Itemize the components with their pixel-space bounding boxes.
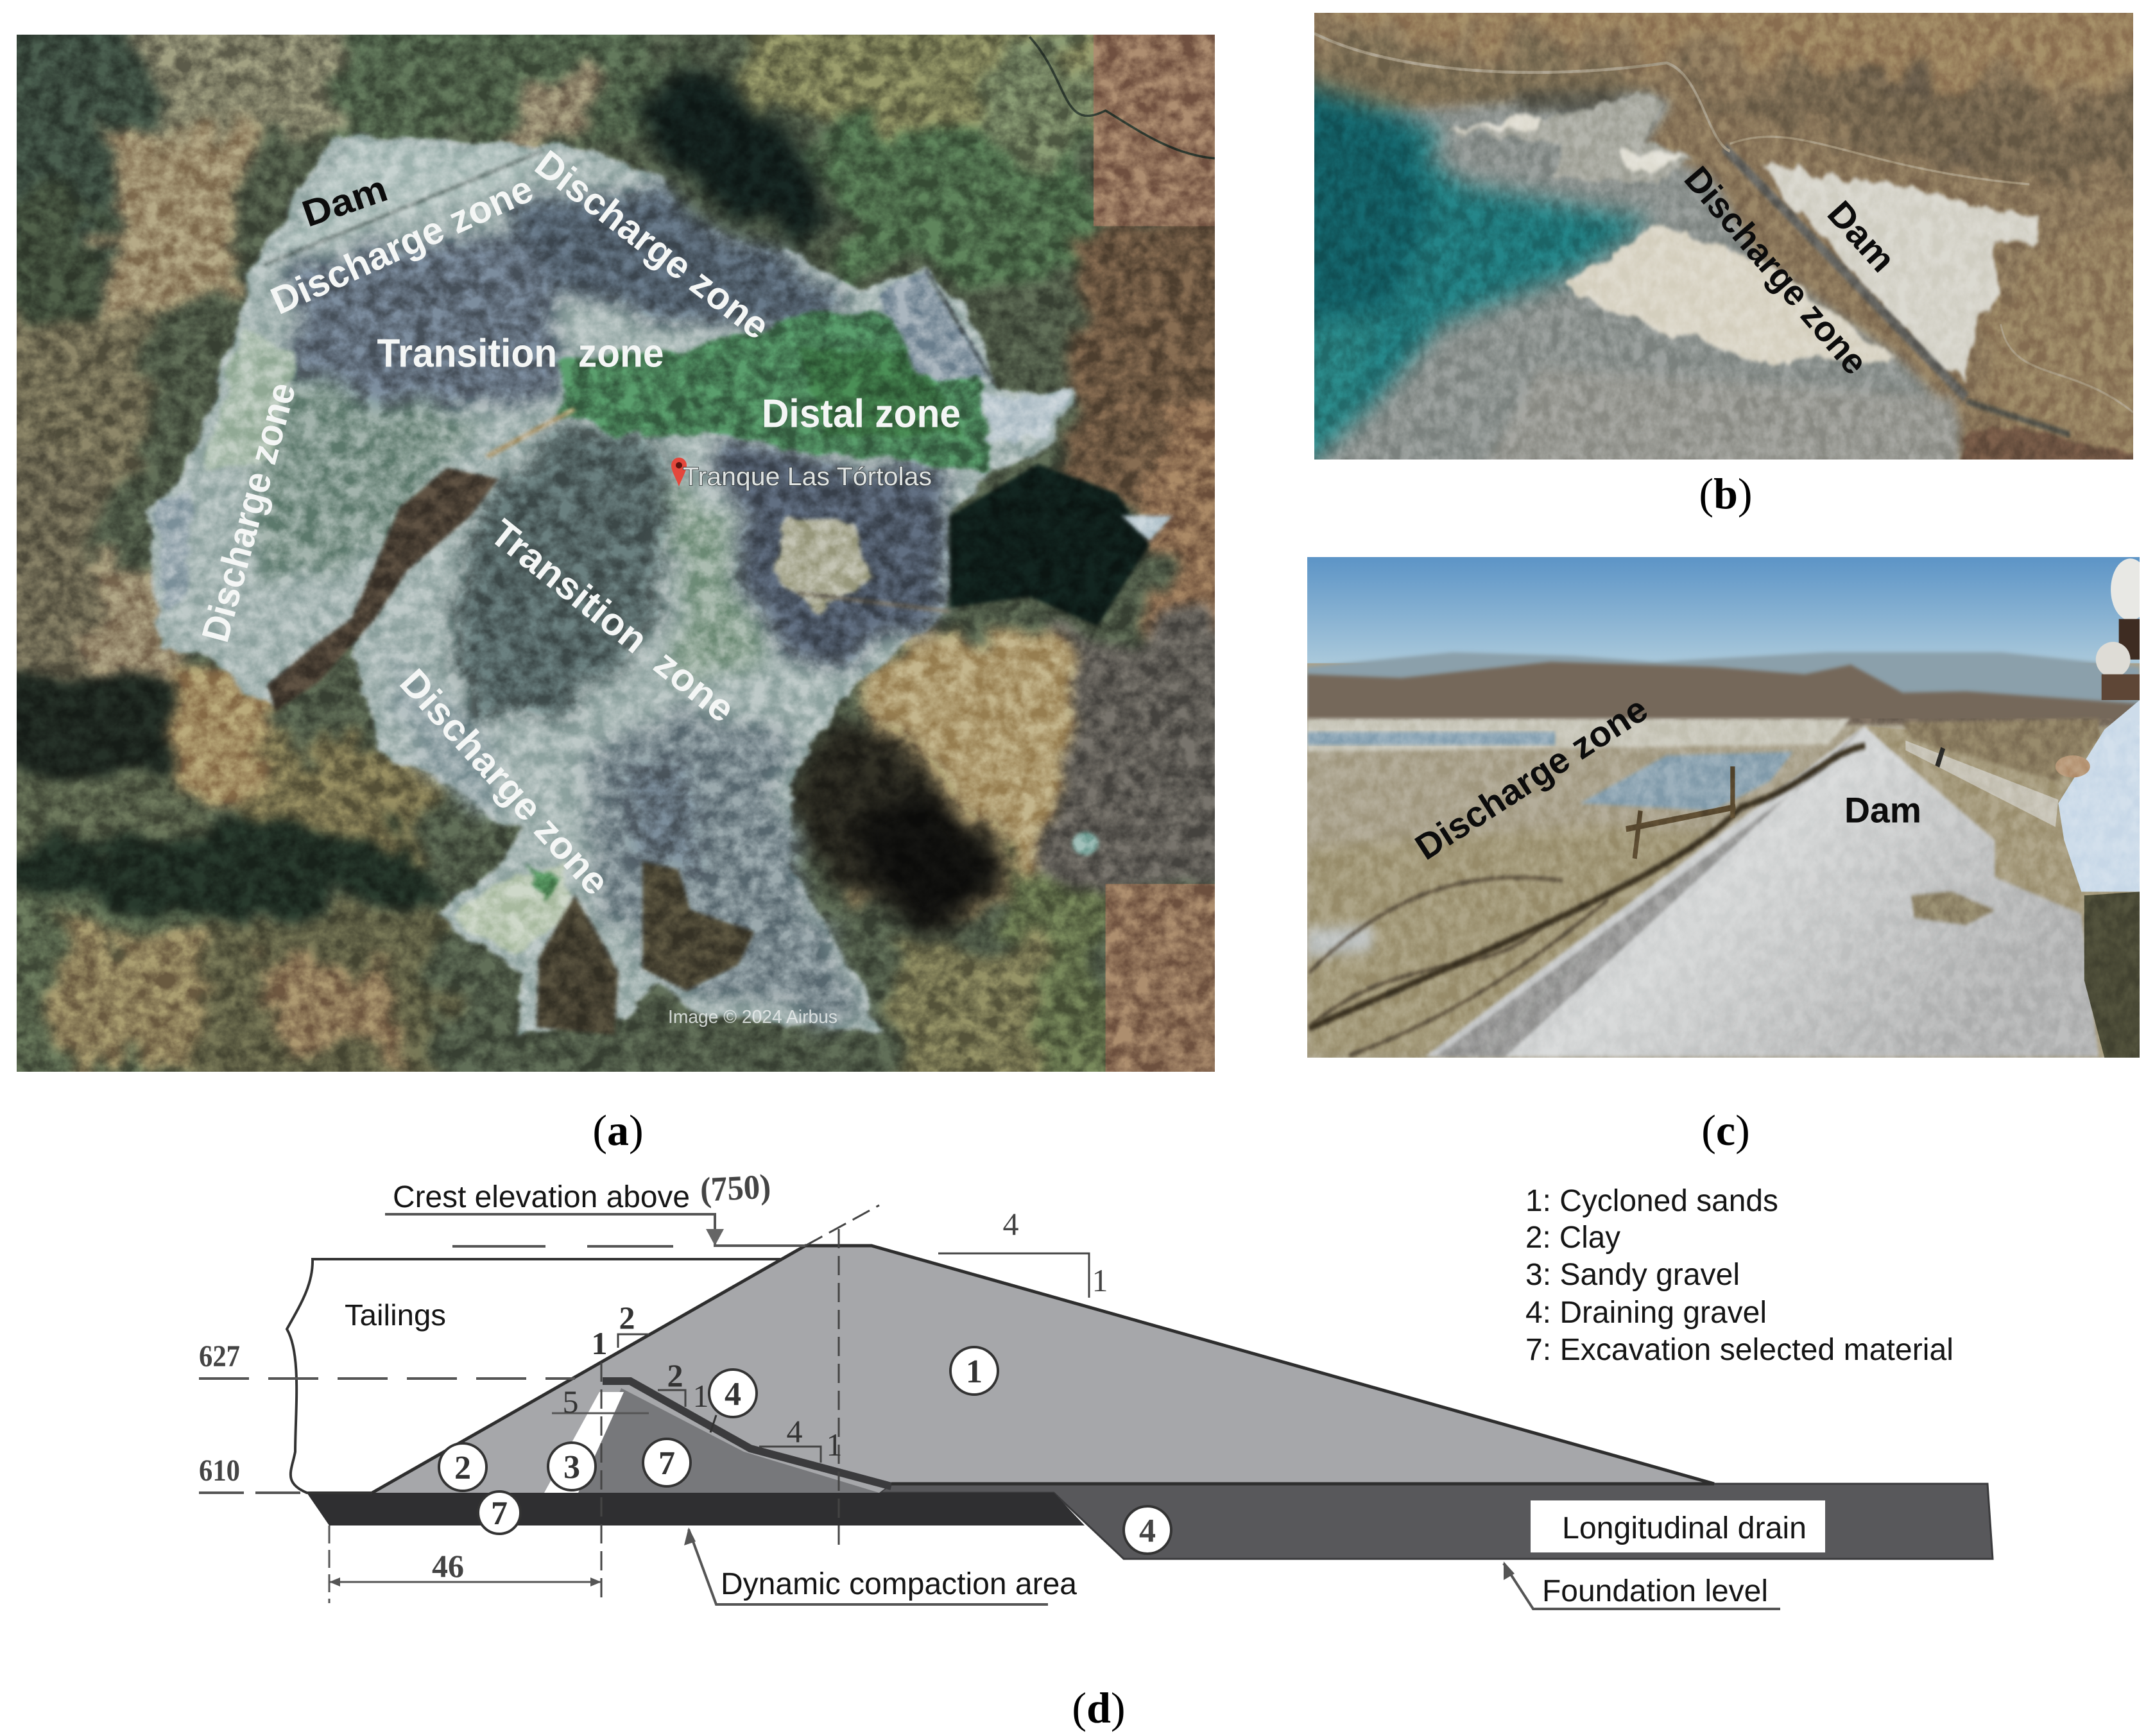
material marker 3: 3 — [563, 1449, 580, 1486]
caption (d): (d) — [1072, 1683, 1126, 1732]
material marker 7 on slab — [478, 1491, 520, 1534]
label: Dam: Dam — [297, 168, 393, 235]
foundation layer — [879, 1484, 1993, 1559]
sandy gravel zone — [544, 1392, 624, 1493]
crest elevation callout — [385, 1167, 805, 1246]
material marker 3 — [548, 1443, 596, 1490]
label: Discharge zone: Discharge zone — [1677, 159, 1876, 382]
elevation 610 marker: 610 — [199, 1454, 240, 1488]
callout: Foundation level — [1504, 1561, 1780, 1609]
callout: Dynamic compaction area: Dynamic compaction area — [721, 1567, 1077, 1601]
slope 4:1 drain: 1 — [827, 1427, 842, 1463]
draining gravel band — [603, 1381, 891, 1486]
slope 4:1 downstream: 4 — [1002, 1206, 1019, 1242]
label: Dam: Dam — [1820, 193, 1903, 280]
legend: 3: Sandy gravel — [1525, 1258, 1740, 1292]
material marker 4 on drain — [709, 1370, 757, 1432]
slope 2:1 drain: 1 — [693, 1378, 708, 1414]
panel c: ground photo of dam crest — [1307, 557, 2150, 1058]
slope 2:1 drain — [658, 1357, 708, 1414]
material marker 7 — [643, 1439, 691, 1486]
label: Discharge zone upper left: Discharge zone — [264, 167, 539, 323]
material marker 4 on foundation — [1124, 1506, 1171, 1554]
label: Tranque Las Tortolas: Tranque Las Tórtolas — [683, 463, 932, 491]
material marker 7 on slab: 7 — [491, 1495, 508, 1532]
satellite photo of Tranque Las Tortolas — [17, 35, 1215, 1072]
slope 4:1 drain: 4 — [787, 1413, 802, 1449]
callout: Foundation level: Foundation level — [1542, 1574, 1768, 1608]
dimension 46 — [329, 1525, 601, 1603]
aerial photo — [1314, 13, 2133, 460]
panel b: aerial photo of dam — [1286, 0, 2155, 486]
rocky peninsula and ridges — [263, 151, 1173, 1035]
label: Transition zone lower: Transition zone — [482, 511, 743, 731]
legend: 4: Draining gravel — [1525, 1296, 1767, 1330]
slope 2:1 drain: 2 — [667, 1357, 683, 1393]
label: Dam: Dam — [1844, 790, 1921, 830]
material marker 2: 2 — [454, 1450, 471, 1486]
legend: 7: Excavation selected material — [1525, 1333, 1953, 1367]
slope 2:1 upstream: 2 — [619, 1300, 635, 1336]
material marker 4 on drain: 4 — [725, 1376, 741, 1413]
centre lines — [601, 1205, 879, 1603]
panel a: annotated satellite view — [0, 0, 1269, 1112]
slope 4:1 drain — [759, 1413, 842, 1463]
label: Tailings: Tailings — [345, 1298, 446, 1332]
tailings surface — [148, 134, 1070, 1035]
dam outline — [372, 1246, 1714, 1493]
material marker 4 on foundation: 4 — [1139, 1513, 1156, 1549]
crest elevation callout: Crest elevation above — [393, 1180, 690, 1214]
elevation 627 marker: 627 — [199, 1339, 240, 1373]
slope 4:1 downstream — [938, 1206, 1108, 1298]
caption (a): (a) — [592, 1106, 644, 1155]
material marker 2 — [439, 1443, 486, 1491]
crest elevation callout: (750) — [699, 1167, 771, 1209]
caption (c): (c) — [1701, 1106, 1750, 1155]
tailings outline — [287, 1259, 780, 1493]
width 5 dimension: 5 — [562, 1384, 579, 1420]
legend: 2: Clay — [1525, 1221, 1620, 1255]
slope 2:1 upstream: 1 — [592, 1325, 607, 1361]
ground photo — [1307, 557, 2140, 1058]
slope 4:1 downstream: 1 — [1092, 1262, 1108, 1298]
slope 2:1 upstream — [592, 1300, 649, 1361]
label: Discharge zone left: Discharge zone — [193, 378, 304, 646]
dam body cycloned sands — [372, 1246, 1714, 1493]
label box: Longitudinal drain — [1531, 1500, 1825, 1552]
caption (b): (b) — [1699, 469, 1753, 518]
material marker 1 — [950, 1347, 998, 1395]
dimension 46: 46 — [432, 1548, 464, 1584]
compacted base slab — [307, 1493, 1085, 1525]
label: Discharge zone upper right: Discharge zone — [528, 142, 778, 348]
label: image credit: Image © 2024 Airbus — [668, 1007, 837, 1027]
label: Discharge zone lower: Discharge zone — [391, 660, 618, 903]
legend — [1525, 1184, 1953, 1367]
icon: map pin — [671, 458, 687, 486]
label: Transition zone upper: Transition zone — [377, 332, 664, 376]
label box: Longitudinal drain: Longitudinal drain — [1562, 1511, 1807, 1545]
legend: 1: Cycloned sands — [1525, 1184, 1778, 1218]
label: Distal zone: Distal zone — [762, 392, 961, 436]
panel d: dam cross-section diagram — [199, 1167, 1993, 1609]
excavation selected material zone — [578, 1388, 879, 1493]
callout: Dynamic compaction area — [684, 1527, 1077, 1604]
material marker 1: 1 — [966, 1354, 983, 1390]
material marker 7: 7 — [658, 1445, 675, 1482]
label: Discharge zone: Discharge zone — [1408, 688, 1654, 868]
